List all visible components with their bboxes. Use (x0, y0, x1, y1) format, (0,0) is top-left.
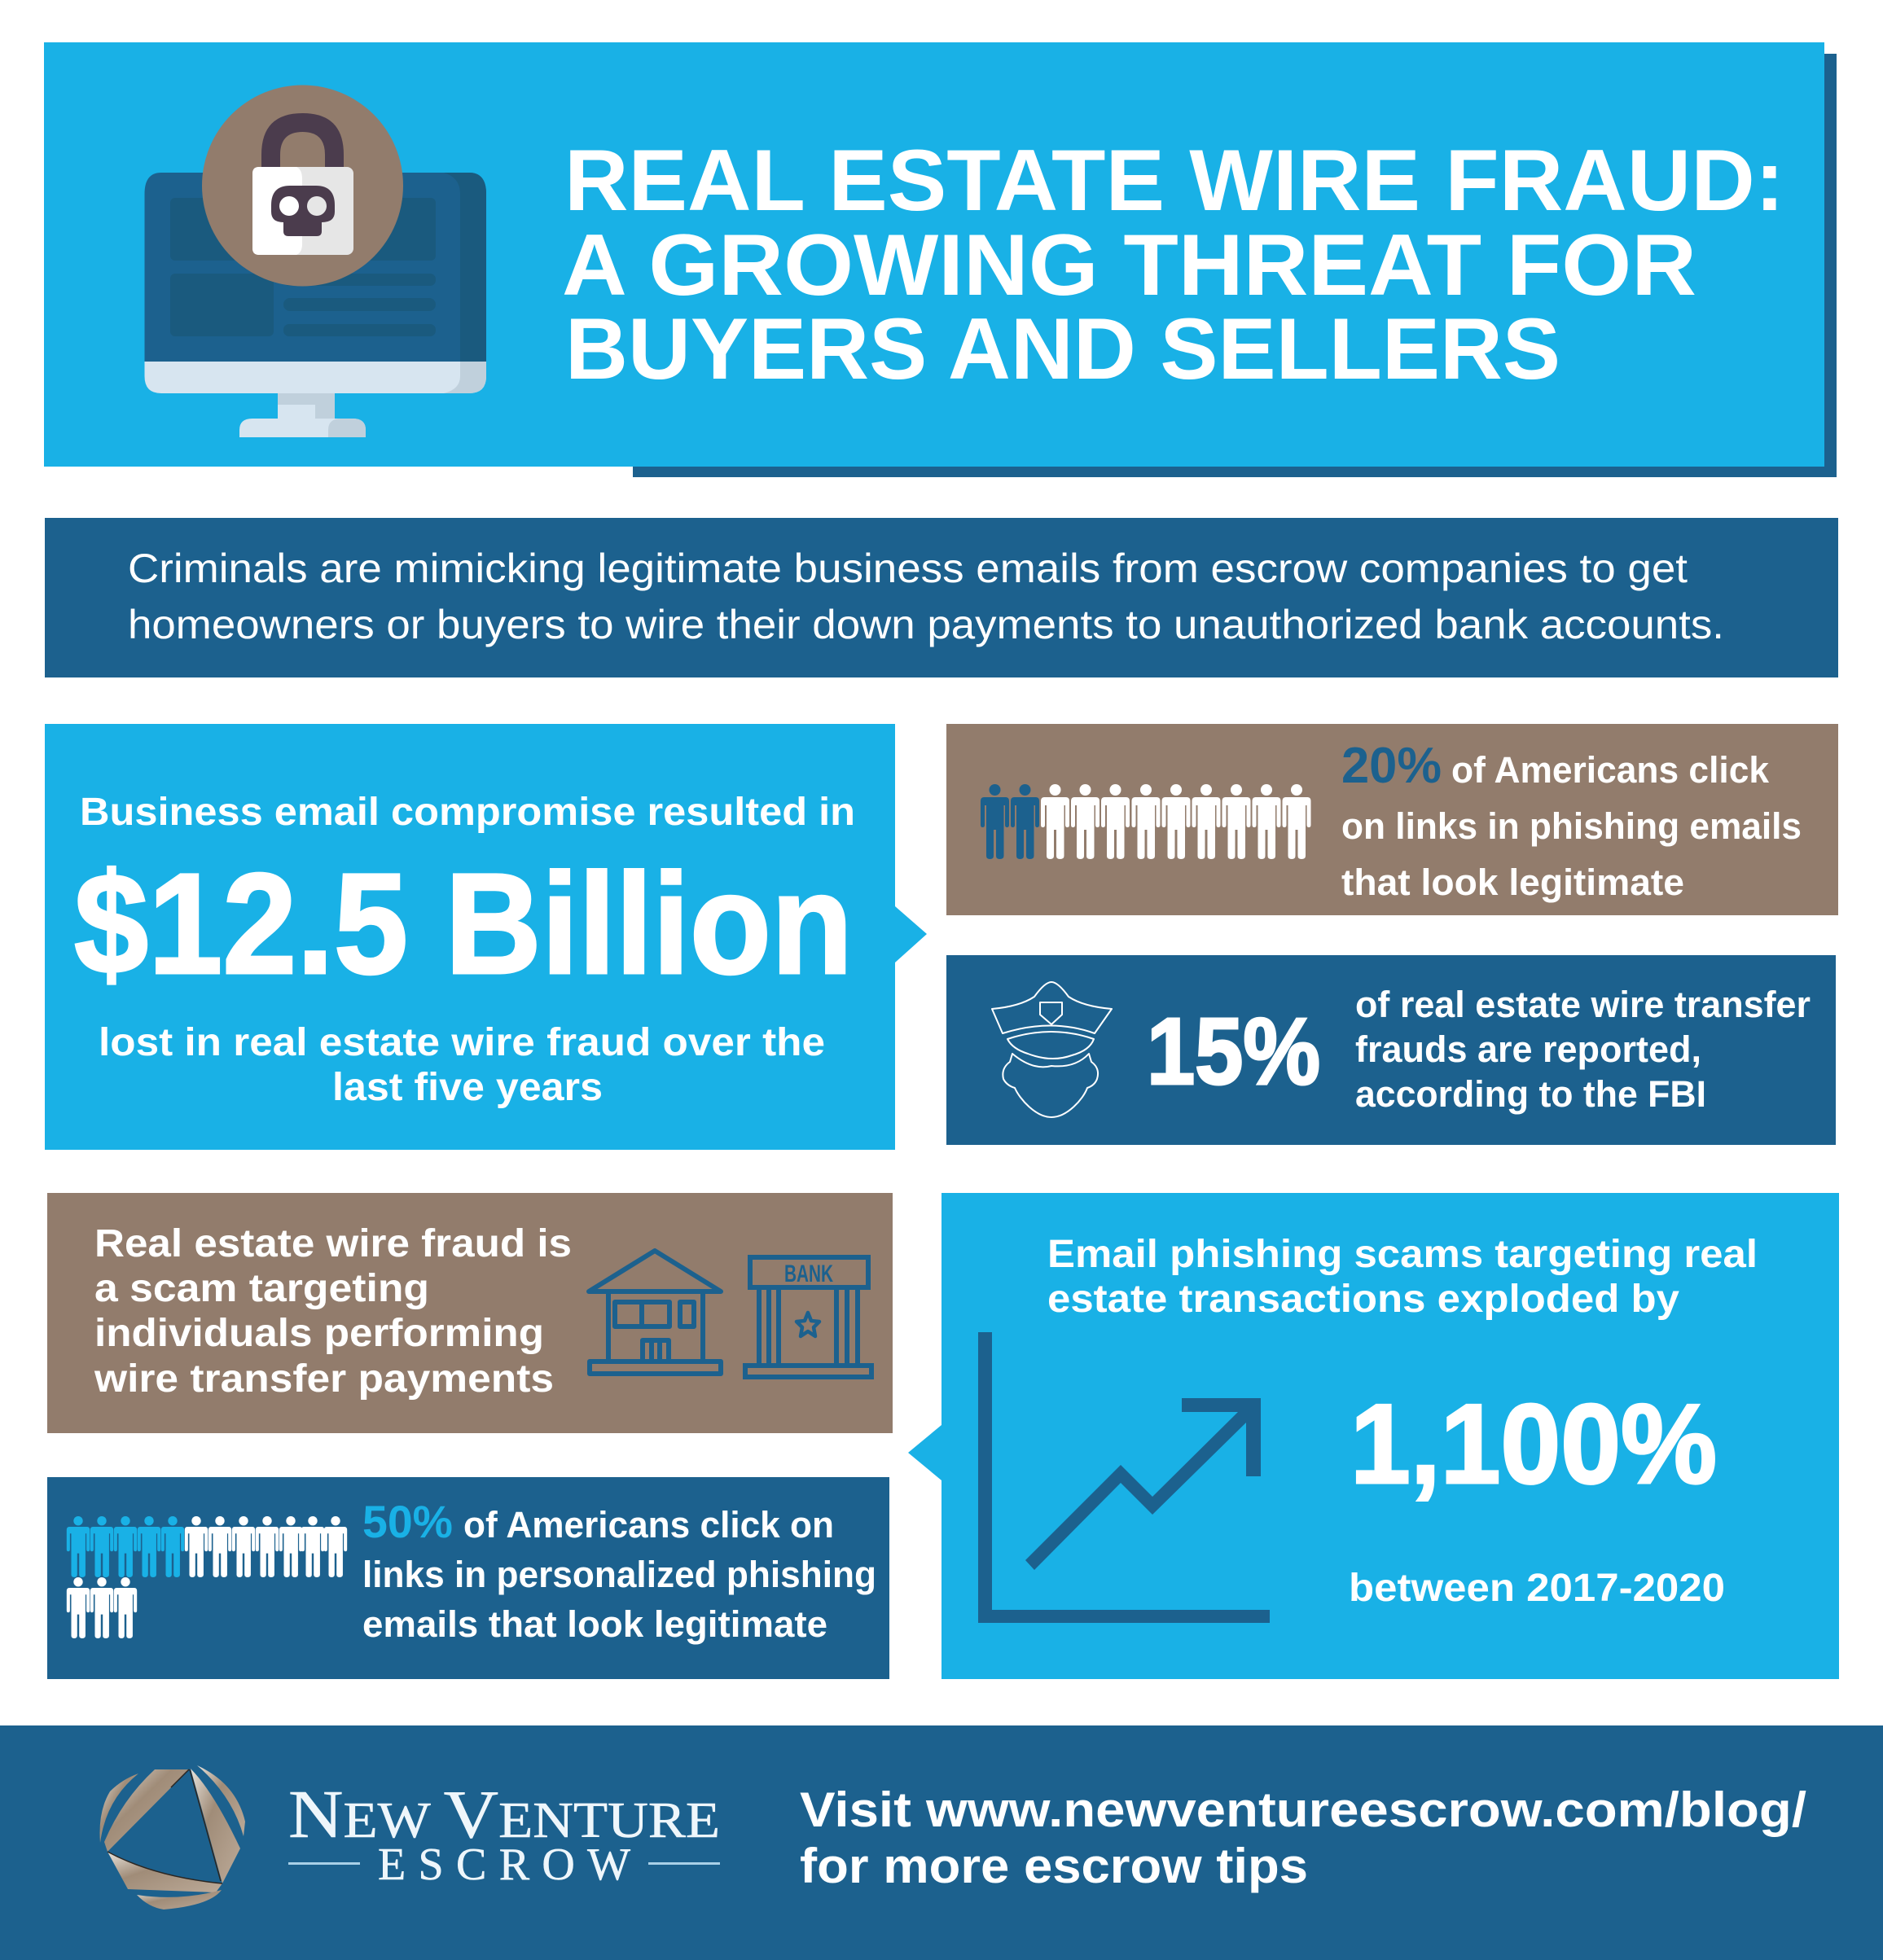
text: growth intro: estate transactions exploded by (1047, 1278, 1679, 1321)
icon: two rows of people, 5 of 15 highlighted (67, 1516, 347, 1638)
panel: header banner (44, 42, 1837, 477)
logo: wordmark: NEW VENTURE (288, 1777, 720, 1853)
text: call to action (800, 1782, 1806, 1893)
text: fbi statistic (1355, 984, 1811, 1115)
text: 20 percent statistic: on links in phishing emails (1341, 805, 1802, 847)
text: growth intro: Email phishing scams targeting real (1047, 1233, 1758, 1276)
panel: footer (0, 1725, 1883, 1960)
text: 50 percent statistic (362, 1496, 876, 1645)
text: loss detail: last five years (332, 1066, 603, 1109)
big number: 1,100 percent: 1,100% (1350, 1381, 1717, 1507)
icon: computer monitor with skull padlock (145, 85, 486, 437)
text: fbi statistic: of real estate wire transfer (1355, 984, 1811, 1025)
text: scam definition: Real estate wire fraud is (94, 1222, 572, 1265)
panel: 15 percent reported (946, 955, 1836, 1145)
panel: 1,100 percent growth (908, 1193, 1839, 1679)
logo: bronze ribbon triangle (99, 1765, 245, 1910)
panel: scam definition (47, 1193, 893, 1433)
chart: rising line on axes (978, 1332, 1270, 1623)
text: 20 percent statistic (1341, 738, 1802, 903)
text: date range: between 2017-2020 (1349, 1567, 1725, 1610)
logo: wordmark: ESCROW (378, 1839, 630, 1890)
text: scam definition: a scam targeting (94, 1267, 429, 1310)
text: scam definition (94, 1222, 572, 1401)
icon: house (589, 1251, 721, 1374)
text: fbi statistic: frauds are reported, (1355, 1028, 1701, 1070)
text: growth intro (1047, 1233, 1758, 1321)
text: 20 percent statistic: that look legitimate (1341, 862, 1684, 903)
text: 50 percent statistic: links in personalized phishing (362, 1554, 876, 1595)
big number: 15 percent: 15% (1147, 998, 1320, 1104)
text: 20 percent statistic: of Americans click (1451, 749, 1770, 791)
title: BUYERS AND SELLERS (565, 300, 1560, 397)
title (562, 131, 1784, 397)
panel: 20 percent click phishing (946, 724, 1838, 915)
text: loss intro: Business email compromise resulted in (80, 791, 855, 834)
text: 50 percent statistic: 50% (362, 1496, 453, 1547)
text: fbi statistic: according to the FBI (1355, 1073, 1706, 1115)
text: call to action: for more escrow tips (800, 1839, 1308, 1893)
text: 50 percent statistic: emails that look legitimate (362, 1603, 827, 1645)
text: loss detail (99, 1021, 825, 1109)
big number: 12.5 billion: $12.5 Billion (74, 844, 853, 1004)
panel: 12.5 billion loss (45, 724, 927, 1150)
panel: 50 percent click personalized phishing (47, 1477, 889, 1679)
text: loss detail: lost in real estate wire fraud over the (99, 1021, 825, 1064)
icon: police officer outline (992, 982, 1112, 1117)
text: scam definition: individuals performing (94, 1312, 544, 1355)
panel: intro statement: Criminals are mimicking legitimate business emails from escrow companies to get (128, 546, 1688, 591)
text: 20 percent statistic: 20% (1341, 738, 1442, 794)
panel: intro statement (45, 518, 1838, 677)
title: REAL ESTATE WIRE FRAUD: (564, 131, 1784, 229)
title: A GROWING THREAT FOR (562, 216, 1696, 314)
text: call to action: Visit www.newventureescrow.com/blog/ (800, 1782, 1806, 1837)
icon: bank: BANK (784, 1261, 833, 1287)
icon: row of people, 2 of 11 highlighted (981, 784, 1311, 859)
logo: wordmark (288, 1777, 720, 1890)
text: 50 percent statistic: of Americans click on (463, 1504, 834, 1546)
panel: intro statement: homeowners or buyers to wire their down payments to unauthorized bank accounts. (128, 602, 1724, 647)
text: scam definition: wire transfer payments (94, 1357, 554, 1401)
icon: bank (745, 1257, 871, 1377)
